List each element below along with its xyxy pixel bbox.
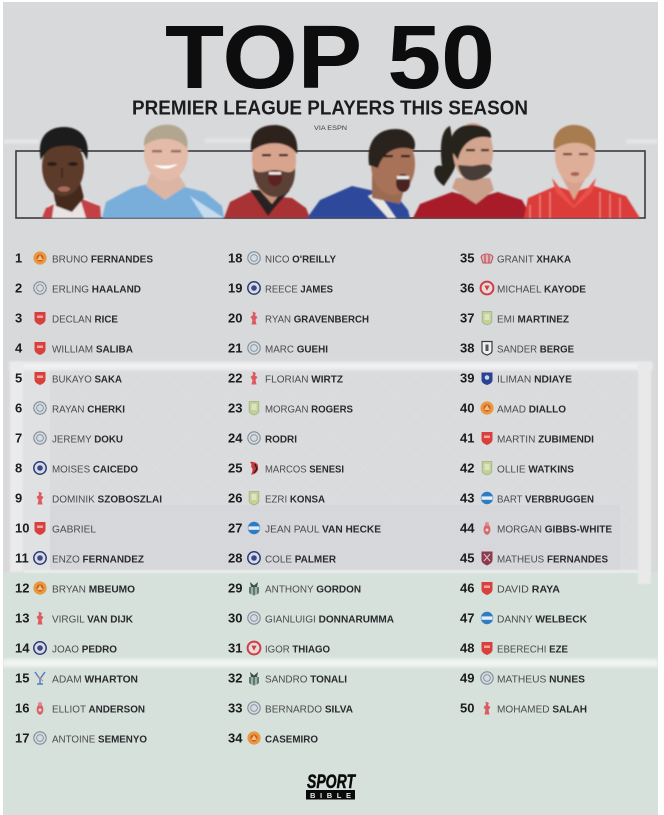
- rank 27: 27: [228, 520, 242, 536]
- rank 25: MARCOS SENESI: [265, 464, 344, 476]
- rank 28: [228, 550, 336, 566]
- rank 37: 37: [460, 310, 474, 326]
- rank 21: [228, 340, 328, 356]
- rank 42: [460, 460, 574, 476]
- rank 3: DECLAN RICE: [52, 314, 118, 326]
- rank 13: 13: [15, 610, 29, 626]
- rank 21: MARC GUEHI: [265, 344, 328, 356]
- player 1: [40, 127, 101, 218]
- title: TOP 50: [165, 8, 495, 108]
- Sport Bible logo: [306, 772, 356, 800]
- rank 3: 3: [15, 310, 22, 326]
- rank 36: [460, 280, 586, 296]
- player 5: [413, 123, 532, 218]
- rank 24: RODRI: [265, 434, 297, 446]
- rank 45: MATHEUS FERNANDES: [497, 554, 608, 566]
- player 2: [102, 125, 224, 218]
- rank 17: ANTOINE SEMENYO: [52, 734, 147, 746]
- rank 46: 46: [460, 580, 474, 596]
- player 3: [224, 125, 310, 218]
- rank 37: EMI MARTINEZ: [497, 314, 570, 326]
- rank 45: [460, 550, 608, 566]
- rank 37: [460, 310, 570, 326]
- rank 39: ILIMAN NDIAYE: [497, 374, 572, 386]
- rank 11: ENZO FERNANDEZ: [52, 554, 145, 566]
- rank 41: 41: [460, 430, 474, 446]
- rank 20: RYAN GRAVENBERCH: [265, 314, 369, 326]
- rank 18: [228, 250, 336, 266]
- rank 33: 33: [228, 700, 242, 716]
- rank 26: [228, 490, 325, 506]
- rank 44: MORGAN GIBBS-WHITE: [497, 524, 612, 536]
- rank 50: MOHAMED SALAH: [497, 704, 587, 716]
- rank 5: BUKAYO SAKA: [52, 374, 122, 386]
- rank 11: [15, 550, 145, 566]
- rank 30: [228, 610, 394, 626]
- rank 42: OLLIE WATKINS: [497, 464, 574, 476]
- rank 38: 38: [460, 340, 474, 356]
- rank 43: [460, 490, 594, 506]
- player frame: [16, 151, 645, 218]
- rank 29: 29: [228, 580, 242, 596]
- rank 20: 20: [228, 310, 242, 326]
- rank 35: GRANIT XHAKA: [497, 254, 571, 266]
- rank 3: [15, 310, 118, 326]
- rank 9: DOMINIK SZOBOSZLAI: [52, 494, 162, 506]
- rank 49: [460, 670, 585, 686]
- rank 34: 34: [228, 730, 243, 746]
- rank 16: 16: [15, 700, 29, 716]
- rank 8: MOISES CAICEDO: [52, 464, 138, 476]
- rank 38: [460, 340, 574, 356]
- rank 47: [460, 610, 587, 626]
- rank 35: [460, 250, 571, 266]
- rank 32: [228, 670, 347, 686]
- rank 19: [228, 280, 333, 296]
- rank 12: 12: [15, 580, 29, 596]
- rank 1: BRUNO FERNANDES: [52, 254, 153, 266]
- rank 48: EBERECHI EZE: [497, 644, 568, 656]
- rank 14: 14: [15, 640, 30, 656]
- rank 7: 7: [15, 430, 22, 446]
- rank 25: [228, 460, 344, 476]
- rank 2: 2: [15, 280, 22, 296]
- rank 26: 26: [228, 490, 242, 506]
- rank 42: 42: [460, 460, 474, 476]
- rank 22: FLORIAN WIRTZ: [265, 374, 344, 386]
- rank 46: [460, 580, 560, 596]
- rank 22: 22: [228, 370, 242, 386]
- rank 33: [228, 700, 353, 716]
- source note: VIA ESPN: [314, 125, 347, 132]
- rank 6: [15, 400, 125, 416]
- rank 26: EZRI KONSA: [265, 494, 325, 506]
- pitch halfway line: [3, 659, 658, 667]
- rank 47: DANNY WELBECK: [497, 614, 587, 626]
- rank 41: MARTIN ZUBIMENDI: [497, 434, 594, 446]
- rank 24: 24: [228, 430, 243, 446]
- rank 49: 49: [460, 670, 474, 686]
- rank 10: GABRIEL: [52, 524, 96, 536]
- player portraits: [40, 123, 640, 218]
- rank 30: GIANLUIGI DONNARUMMA: [265, 614, 394, 626]
- rank 40: 40: [460, 400, 474, 416]
- rank 12: [15, 580, 135, 596]
- rank 48: 48: [460, 640, 474, 656]
- rank 17: 17: [15, 730, 29, 746]
- rank 28: 28: [228, 550, 242, 566]
- rank 25: 25: [228, 460, 242, 476]
- rank 18: 18: [228, 250, 242, 266]
- rank 19: 19: [228, 280, 242, 296]
- rank 16: [15, 700, 145, 716]
- rank 18: NICO O'REILLY: [265, 254, 336, 266]
- rank 14: JOAO PEDRO: [52, 644, 117, 656]
- rank 39: [460, 370, 572, 386]
- rank 34: CASEMIRO: [265, 734, 318, 746]
- player 4: [307, 129, 415, 218]
- rank 10: [15, 520, 96, 536]
- rank 17: [15, 730, 147, 746]
- rank 7: [15, 430, 123, 446]
- rank 5: [15, 370, 122, 386]
- rank 31: 31: [228, 640, 242, 656]
- rankings column 3: [460, 250, 612, 716]
- rank 50: [460, 700, 587, 716]
- Sport Bible logo: SPORT: [307, 772, 356, 793]
- rankings column 1: [15, 250, 162, 746]
- rank 38: SANDER BERGE: [497, 344, 574, 356]
- rank 15: [15, 670, 138, 686]
- rank 13: VIRGIL VAN DIJK: [52, 614, 133, 626]
- rank 11: 11: [15, 550, 29, 566]
- rank 9: 9: [15, 490, 22, 506]
- rank 2: [15, 280, 141, 296]
- rank 8: 8: [15, 460, 22, 476]
- subtitle: PREMIER LEAGUE PLAYERS THIS SEASON: [132, 98, 528, 120]
- player 6: [524, 125, 640, 218]
- rank 28: COLE PALMER: [265, 554, 336, 566]
- rank 49: MATHEUS NUNES: [497, 674, 585, 686]
- rank 5: 5: [15, 370, 22, 386]
- rank 2: ERLING HAALAND: [52, 284, 141, 296]
- rank 44: [460, 520, 612, 536]
- rank 13: [15, 610, 133, 626]
- rank 4: 4: [15, 340, 23, 356]
- rank 24: [228, 430, 297, 446]
- rank 44: 44: [460, 520, 475, 536]
- rank 8: [15, 460, 138, 476]
- rank 16: ELLIOT ANDERSON: [52, 704, 145, 716]
- rank 32: SANDRO TONALI: [265, 674, 347, 686]
- rank 33: BERNARDO SILVA: [265, 704, 353, 716]
- rankings column 2: [228, 250, 394, 746]
- rank 12: BRYAN MBEUMO: [52, 584, 135, 596]
- rank 14: [15, 640, 117, 656]
- rank 6: 6: [15, 400, 22, 416]
- rank 19: REECE JAMES: [265, 284, 333, 296]
- rank 43: 43: [460, 490, 474, 506]
- rank 4: [15, 340, 133, 356]
- rank 31: [228, 640, 330, 656]
- rank 36: 36: [460, 280, 474, 296]
- rank 9: [15, 490, 162, 506]
- rank 31: IGOR THIAGO: [265, 644, 330, 656]
- rank 7: JEREMY DOKU: [52, 434, 123, 446]
- rank 15: 15: [15, 670, 29, 686]
- rank 23: [228, 400, 353, 416]
- rank 4: WILLIAM SALIBA: [52, 344, 133, 356]
- rank 22: [228, 370, 344, 386]
- goal frame and net: [10, 362, 652, 584]
- rank 35: 35: [460, 250, 474, 266]
- rank 27: [228, 520, 381, 536]
- rank 1: 1: [15, 250, 22, 266]
- rank 23: 23: [228, 400, 242, 416]
- rank 23: MORGAN ROGERS: [265, 404, 353, 416]
- rank 50: 50: [460, 700, 474, 716]
- rank 39: 39: [460, 370, 474, 386]
- rank 41: [460, 430, 594, 446]
- rank 1: [15, 250, 153, 266]
- rank 32: 32: [228, 670, 242, 686]
- Sport Bible logo: BIBLE: [310, 791, 351, 800]
- rank 47: 47: [460, 610, 474, 626]
- rank 29: ANTHONY GORDON: [265, 584, 361, 596]
- rank 10: 10: [15, 520, 29, 536]
- rank 43: BART VERBRUGGEN: [497, 494, 594, 506]
- rank 34: [228, 730, 318, 746]
- rank 40: AMAD DIALLO: [497, 404, 566, 416]
- rank 20: [228, 310, 369, 326]
- rank 27: JEAN PAUL VAN HECKE: [265, 524, 381, 536]
- rank 46: DAVID RAYA: [497, 584, 560, 596]
- rank 15: ADAM WHARTON: [52, 674, 138, 686]
- rank 29: [228, 580, 361, 596]
- rank 48: [460, 640, 568, 656]
- rank 6: RAYAN CHERKI: [52, 404, 125, 416]
- rank 30: 30: [228, 610, 242, 626]
- rank 40: [460, 400, 566, 416]
- rank 36: MICHAEL KAYODE: [497, 284, 586, 296]
- rank 21: 21: [228, 340, 242, 356]
- rank 45: 45: [460, 550, 474, 566]
